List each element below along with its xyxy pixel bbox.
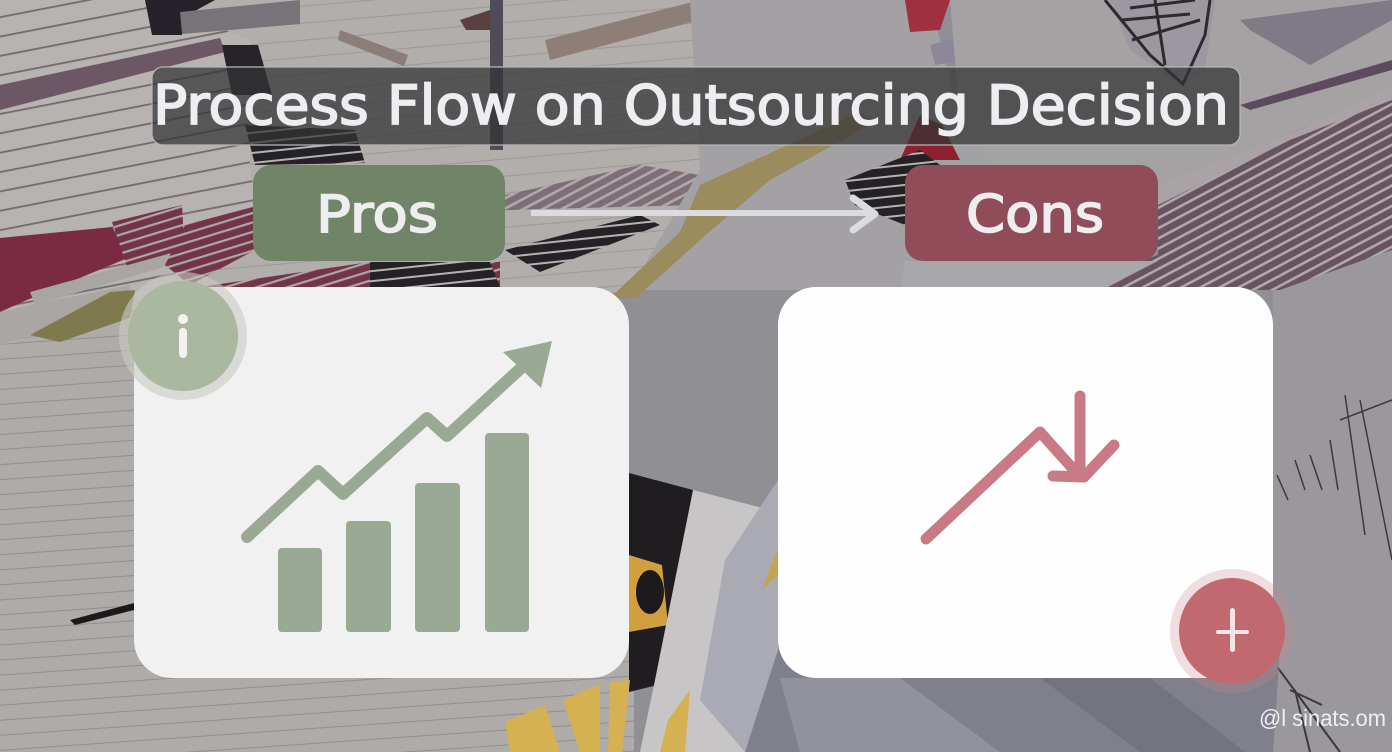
title text: Process Flow on Outsourcing Decision <box>153 74 1229 137</box>
icon: info badge <box>119 272 247 400</box>
icon: falling trend arrow <box>926 396 1114 539</box>
icon: rising bar chart <box>247 341 552 632</box>
cons label: Cons <box>966 185 1104 245</box>
watermark: @l sinats.om <box>1259 705 1386 731</box>
title banner <box>152 67 1240 145</box>
flow arrow from pros to cons <box>531 198 875 230</box>
pros label <box>253 165 505 261</box>
icon: plus badge <box>1170 569 1294 693</box>
panel: pros chart card <box>134 287 629 678</box>
pros label: Pros <box>316 185 438 245</box>
cons label <box>905 165 1158 261</box>
panel: cons chart card <box>778 287 1273 678</box>
